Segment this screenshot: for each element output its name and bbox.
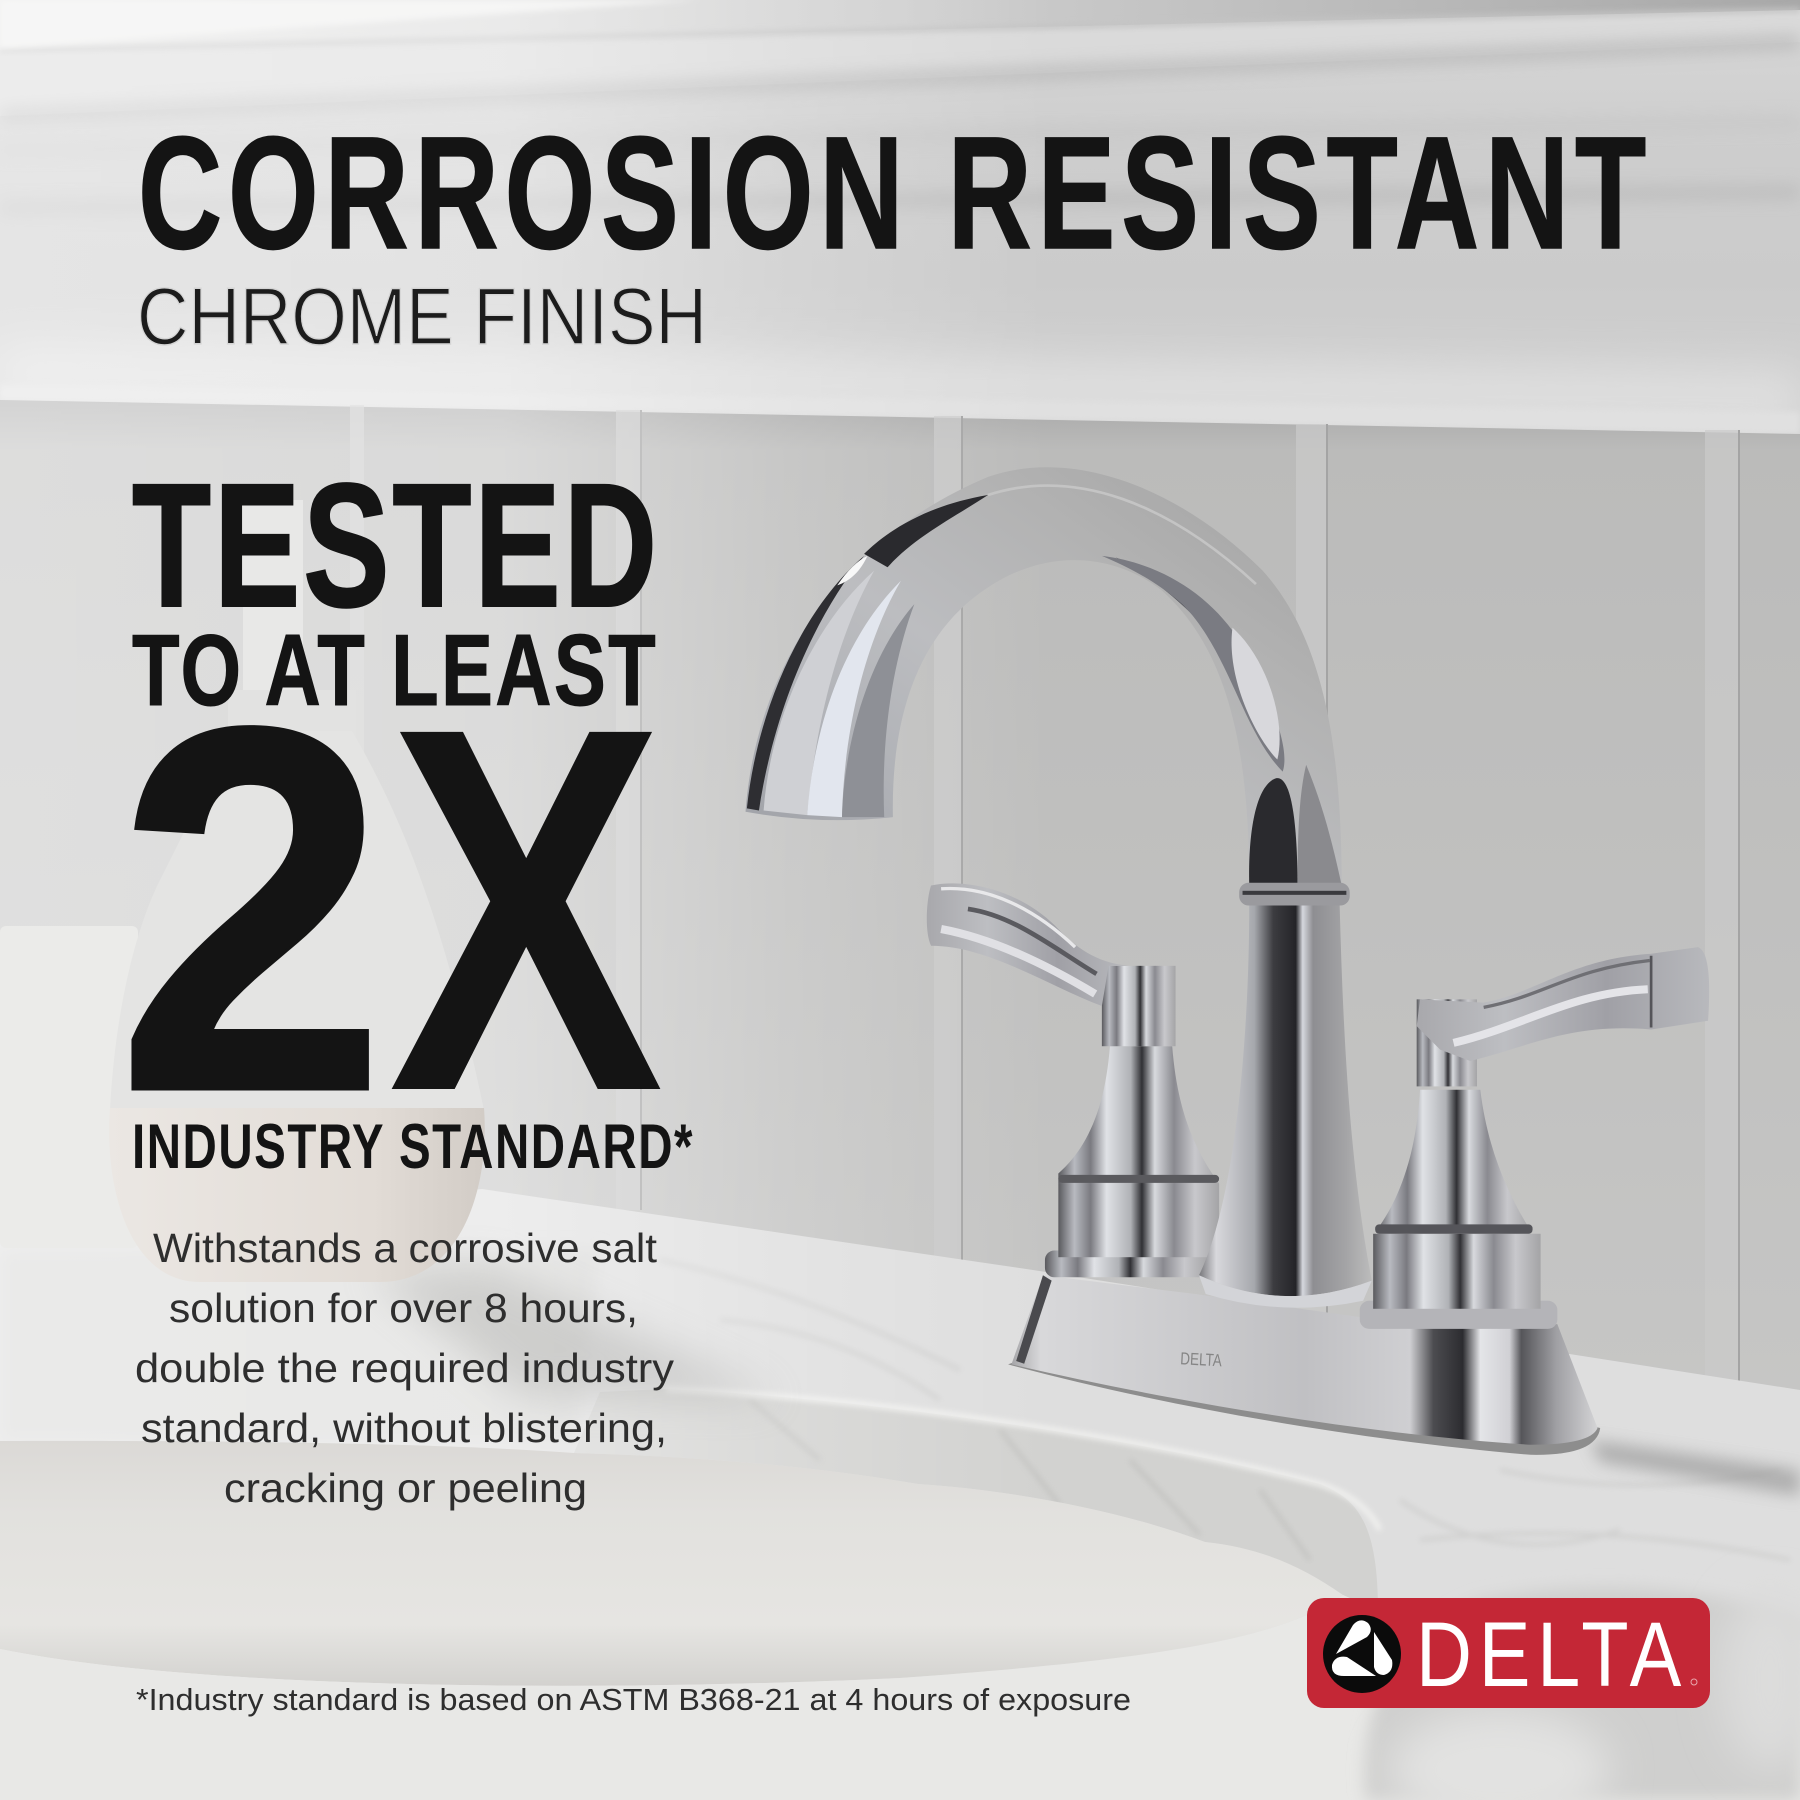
headline: tested to at least 2x xyxy=(116,448,694,1199)
body text: cracking or peeling xyxy=(224,1465,587,1511)
wall panels xyxy=(0,400,1800,1400)
logo: delta: DELTA xyxy=(1416,1604,1688,1706)
counter front xyxy=(0,1595,1800,1800)
left valve xyxy=(927,883,1219,1277)
headline: tested to at least 2x: TESTED xyxy=(132,448,660,644)
towel xyxy=(1365,1587,1800,1800)
counter veins xyxy=(660,1260,1790,1560)
body text: standard, without blistering, xyxy=(141,1405,667,1451)
faucet xyxy=(746,467,1709,1455)
soap dispenser xyxy=(109,500,485,1282)
chrome highlights on spout xyxy=(747,556,864,810)
marble front band xyxy=(574,1389,1378,1610)
spout and body xyxy=(746,467,1372,1308)
counter top xyxy=(0,1189,1800,1800)
crown molding xyxy=(0,0,1800,434)
body text: double the required industry xyxy=(135,1345,675,1391)
body text: Withstands a corrosive salt xyxy=(153,1225,658,1271)
headline: tested to at least 2x: 2 xyxy=(116,619,387,1199)
faucet shadow on counter xyxy=(1590,1440,1800,1496)
candle xyxy=(0,926,138,1248)
logo: delta xyxy=(1307,1598,1710,1708)
deck plate: DELTA xyxy=(1180,1348,1223,1370)
soap shadow xyxy=(370,1265,780,1400)
subtitle: CHROME FINISH xyxy=(137,272,707,362)
body text: solution for over 8 hours, xyxy=(169,1285,638,1331)
footnote: *Industry standard is based on ASTM B368-21 at 4 hours of exposure xyxy=(136,1682,1131,1717)
left white wash xyxy=(0,0,1050,1800)
body text xyxy=(135,1225,675,1511)
icon: delta emblem xyxy=(1323,1615,1401,1693)
headline: tested to at least 2x: TO AT LEAST xyxy=(132,615,658,727)
sink basin xyxy=(0,1441,1343,1686)
headline: tested to at least 2x: INDUSTRY STANDARD* xyxy=(132,1112,694,1182)
headline: tested to at least 2x: X xyxy=(388,619,666,1199)
right valve xyxy=(1360,947,1709,1329)
deck plate xyxy=(1008,1275,1600,1455)
